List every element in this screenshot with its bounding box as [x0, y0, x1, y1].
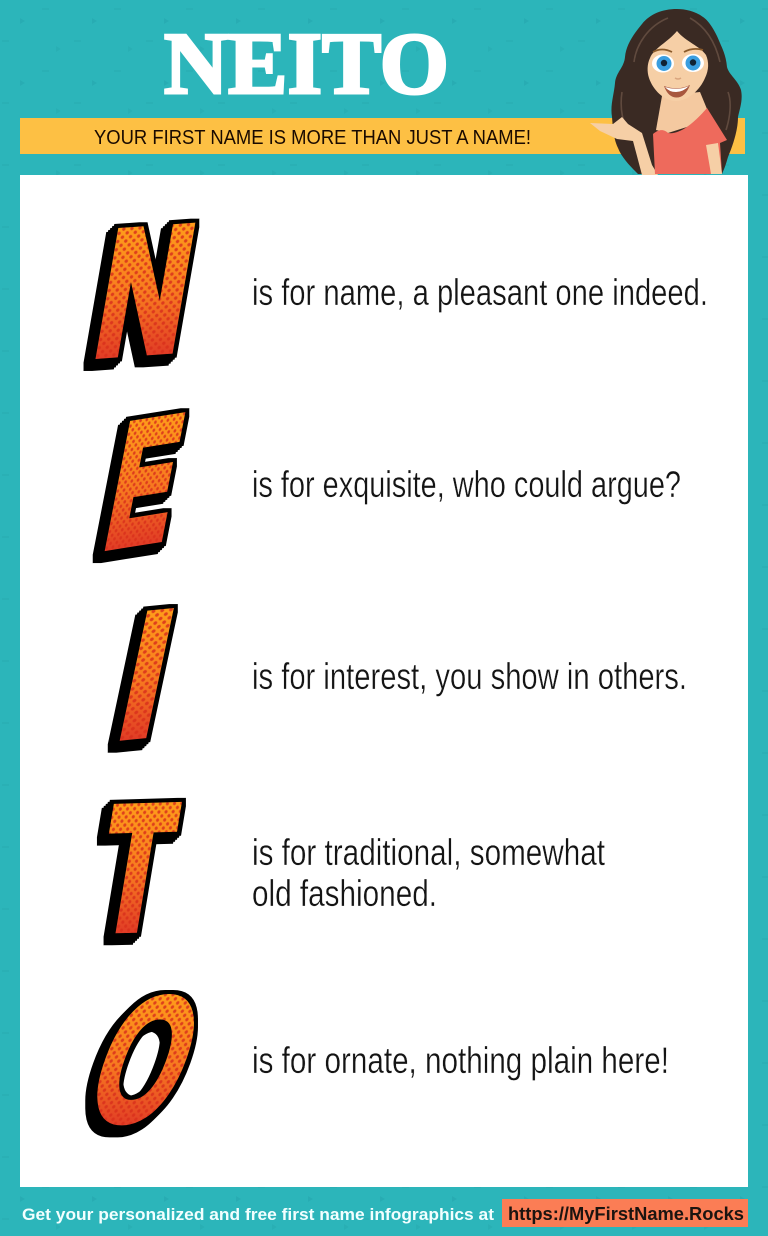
arm and hand: [590, 117, 658, 175]
letter T: T: [89, 770, 185, 966]
shirt: [653, 108, 727, 174]
letter O row: [66, 960, 669, 1159]
letter T row: [89, 770, 606, 966]
footer: [22, 1199, 748, 1227]
icon: cartoon woman presenter: [590, 9, 742, 175]
letter N: N: [85, 191, 205, 392]
panel: letters and meanings: [20, 175, 748, 1187]
eyes: [652, 54, 704, 72]
banner: [20, 118, 745, 154]
letter E: E: [95, 381, 194, 584]
T meaning: is for traditional, somewhat: [252, 832, 606, 873]
banner text: YOUR FIRST NAME IS MORE THAN JUST A NAME!: [94, 126, 531, 149]
title: NEITO: [164, 15, 449, 113]
letter E row: [95, 381, 681, 584]
letter I: I: [108, 576, 185, 774]
footer text: Get your personalized and free first name infographics at: [22, 1205, 494, 1224]
footer link: [502, 1199, 748, 1227]
letter N row: [85, 191, 708, 392]
letter I row: [108, 576, 687, 774]
footer link: https://MyFirstName.Rocks: [508, 1204, 744, 1224]
O meaning: is for ornate, nothing plain here!: [252, 1040, 669, 1081]
letter O: O: [66, 960, 225, 1159]
T meaning: old fashioned.: [252, 873, 437, 914]
